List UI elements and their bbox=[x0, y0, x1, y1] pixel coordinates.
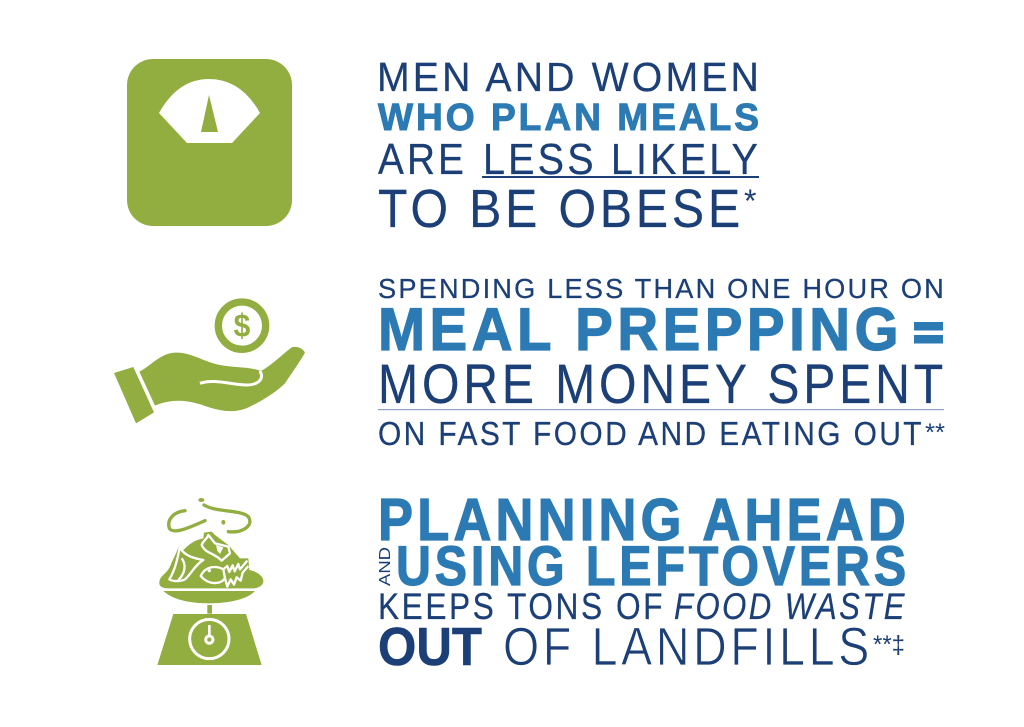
text block: food waste statement: FOOD WASTE bbox=[674, 586, 907, 627]
equals sign bbox=[914, 322, 943, 344]
text block: food waste statement: PLANNING AHEAD bbox=[378, 487, 910, 553]
text block: obesity statement: ARE bbox=[378, 135, 467, 184]
text block: obesity statement: LESS LIKELY bbox=[483, 135, 761, 184]
text block: obesity statement: TO BE OBESE bbox=[378, 179, 744, 239]
icon: hand holding coin bbox=[114, 302, 305, 423]
text block: food waste statement bbox=[377, 487, 910, 677]
text block: obesity statement: WHO PLAN MEALS bbox=[378, 97, 762, 139]
panel: obesity row bbox=[127, 54, 762, 239]
icon: swirl of odor bbox=[169, 498, 250, 532]
text block: obesity statement: MEN AND WOMEN bbox=[377, 54, 762, 100]
text block: food waste statement: OUT bbox=[378, 617, 482, 677]
text block: fast food statement bbox=[378, 273, 947, 452]
text block: food waste statement: USING LEFTOVERS bbox=[396, 534, 910, 597]
text block: food waste statement: AND bbox=[377, 547, 394, 586]
text block: food waste statement: **‡ bbox=[873, 631, 905, 659]
icon: food scraps on kitchen scale bbox=[157, 498, 263, 665]
panel: fast food row bbox=[114, 273, 947, 452]
text block: fast food statement: ON FAST FOOD AND EATING OUT bbox=[378, 415, 924, 452]
icon: hand holding coin: $ bbox=[234, 308, 251, 344]
icon: bathroom scale bbox=[127, 59, 292, 226]
text block: fast food statement: MORE MONEY SPENT bbox=[378, 352, 947, 415]
panel: food waste row bbox=[157, 487, 910, 677]
text block: food waste statement: KEEPS TONS OF bbox=[378, 586, 665, 627]
text block: obesity statement: * bbox=[744, 183, 756, 219]
text block: fast food statement: MEAL PREPPING bbox=[378, 296, 903, 363]
text block: fast food statement: SPENDING LESS THAN ONE HOUR ON bbox=[378, 273, 946, 304]
text block: obesity statement bbox=[377, 54, 762, 239]
text block: fast food statement: ** bbox=[925, 419, 945, 447]
food pile bbox=[159, 532, 263, 588]
text block: food waste statement: OF LANDFILLS bbox=[503, 617, 873, 677]
